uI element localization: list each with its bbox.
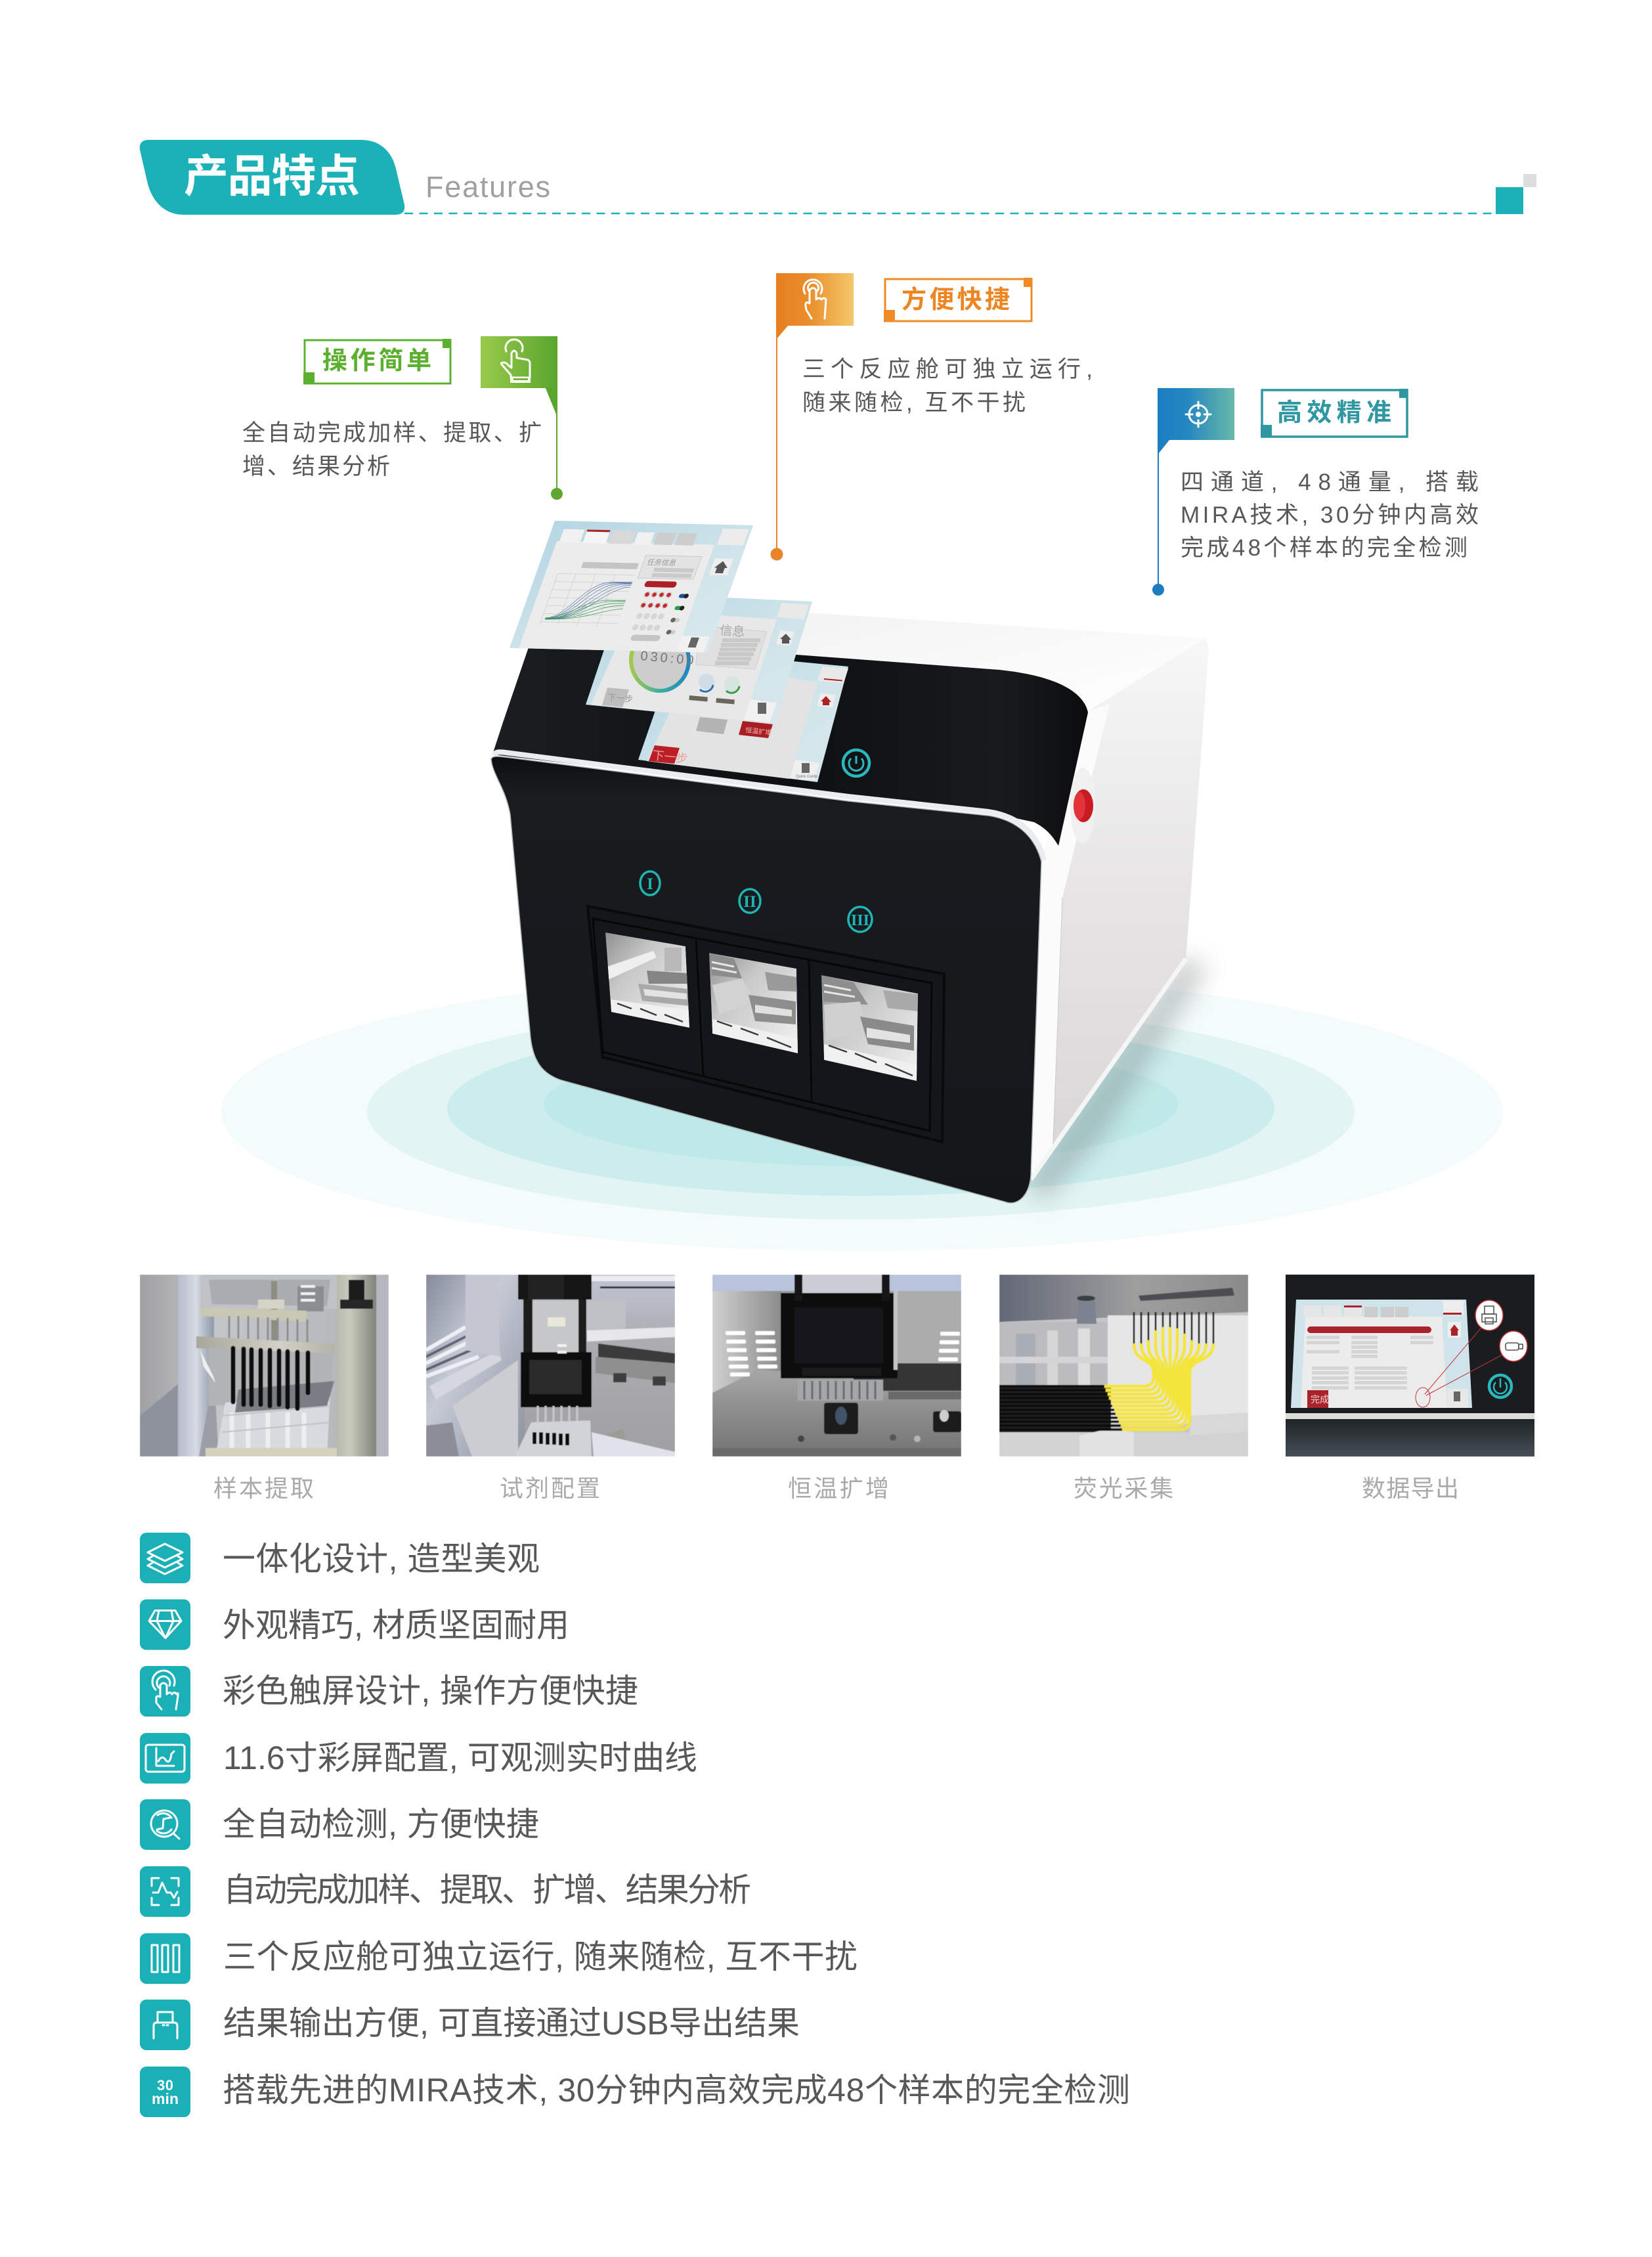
feature 9: MIRA technology in 30 minutes	[140, 2067, 1130, 2117]
dashed header rule with end squares	[404, 174, 1536, 214]
machine side panel	[1030, 638, 1209, 1182]
chamber window II	[709, 953, 798, 1053]
channel marker I	[640, 871, 660, 895]
upper black touch panel	[492, 644, 1088, 846]
feature 5: fully automatic detection: 全自动检测, 方便快捷	[223, 1806, 539, 1843]
subtitle: Features: Features	[425, 170, 550, 204]
channel marker II	[739, 889, 760, 913]
leader line and dot	[771, 335, 783, 561]
chamber window I	[605, 932, 689, 1028]
callout description: 全自动完成加样、提取、扩	[242, 420, 542, 446]
photo: data export	[1286, 1275, 1534, 1457]
callout description: 随来随检, 互不干扰	[802, 390, 1026, 416]
feature 7: three independent chambers	[140, 1933, 858, 1984]
label box	[884, 278, 1032, 322]
title banner	[140, 140, 404, 215]
callout description	[1181, 470, 1479, 561]
feature 1: integrated design: 一体化设计, 造型美观	[223, 1541, 540, 1577]
touch screen 2: temperature step	[586, 593, 812, 724]
task info box: 任务信息	[645, 558, 678, 567]
caption: 数据导出: 数据导出	[1362, 1475, 1459, 1502]
leader line and dot	[1152, 450, 1164, 596]
channel marker III: III	[851, 912, 869, 929]
amplification chart	[540, 573, 635, 627]
photo: data export: 完成	[1311, 1394, 1329, 1405]
feature 3: colour touch screen	[140, 1666, 638, 1717]
label box	[1261, 389, 1408, 437]
label box	[303, 339, 451, 384]
feature 4: 11.6 inch screen	[140, 1733, 697, 1784]
caption: 恒温扩增: 恒温扩增	[788, 1475, 889, 1502]
touch screen 3: reagent step: Quick Guide	[796, 775, 818, 779]
feature 6: automated workflow	[140, 1866, 751, 1917]
photo: isothermal amplification	[712, 1275, 961, 1457]
icon: target on blue flag	[1158, 388, 1234, 454]
feature 9: MIRA technology in 30 minutes: min	[152, 2090, 179, 2107]
callout description: 四通道, 48通量, 搭载	[1181, 470, 1479, 495]
feature 9: MIRA technology in 30 minutes: 30	[157, 2077, 173, 2093]
feature 8: USB export: 结果输出方便, 可直接通过USB导出结果	[223, 2005, 800, 2042]
caption: 荧光采集: 荧光采集	[1074, 1475, 1173, 1502]
instrument illustration	[491, 521, 1209, 1203]
feature 2: compact and sturdy	[140, 1600, 569, 1650]
feature 7: three independent chambers: 三个反应舱可独立运行, 随来随检, 互不干扰	[223, 1939, 858, 1975]
front black panel	[491, 756, 1041, 1203]
photo: fluorescence collection	[999, 1275, 1248, 1457]
caption: 试剂配置: 试剂配置	[500, 1475, 600, 1502]
icon: touch on orange flag	[776, 273, 854, 339]
photo: sample extraction	[140, 1275, 389, 1457]
callout description: 三个反应舱可独立运行,	[802, 357, 1093, 382]
touch screen 2: temperature step: 下一步	[607, 692, 634, 704]
side buttons	[676, 529, 749, 653]
callout: 高效精准	[1152, 388, 1479, 596]
task info box	[638, 556, 702, 579]
label box: 操作简单	[322, 347, 431, 375]
feature 4: 11.6 inch screen: 11.6寸彩屏配置, 可观测实时曲线	[223, 1740, 697, 1776]
reaction chamber door frame	[588, 906, 944, 1142]
title banner: 产品特点	[184, 152, 360, 202]
callout: 方便快捷	[771, 273, 1093, 561]
feature 1: integrated design	[140, 1533, 540, 1583]
feature list	[140, 1533, 1130, 2117]
channel marker I: I	[647, 875, 653, 893]
power button	[843, 750, 869, 776]
touch screen 2: temperature step: 030:00	[640, 649, 697, 668]
leader line and dot	[551, 414, 563, 500]
feature 5: fully automatic detection	[140, 1799, 539, 1850]
callout description	[802, 357, 1093, 416]
touch screen 3: reagent step: 恒温扩增	[745, 726, 772, 737]
cast shadow	[1024, 959, 1208, 1202]
header: product features	[140, 140, 1536, 215]
label box: 方便快捷	[902, 286, 1010, 314]
callout description: 增、结果分析	[242, 454, 390, 479]
emergency stop button	[1070, 768, 1095, 844]
callout description: MIRA技术, 30分钟内高效	[1181, 502, 1479, 528]
status pill	[581, 562, 639, 569]
machine top surface	[796, 613, 1207, 712]
touch screen 3: reagent step	[638, 650, 848, 782]
channel marker II: II	[743, 893, 756, 911]
icon: tap gesture on green flag	[481, 336, 557, 416]
chamber window III	[821, 975, 918, 1081]
white trim strip	[494, 752, 1044, 860]
tabs	[559, 529, 698, 546]
feature 3: colour touch screen: 彩色触屏设计, 操作方便快捷	[223, 1673, 638, 1709]
channel marker III	[848, 907, 872, 932]
channel indicators	[624, 581, 693, 642]
callout description	[242, 420, 542, 479]
feature 2: compact and sturdy: 外观精巧, 材质坚固耐用	[223, 1607, 569, 1644]
callout: 操作简单	[242, 336, 563, 500]
caption: 样本提取: 样本提取	[213, 1475, 314, 1502]
touch screen 2: temperature step: 信息	[720, 623, 745, 640]
touch screen 1: amplification curves	[510, 521, 753, 653]
feature 8: USB export	[140, 2000, 800, 2050]
platform ellipses under instrument	[221, 973, 1503, 1251]
feature 9: MIRA technology in 30 minutes: 搭载先进的MIRA技术, 30分钟内高效完成48个样本的完全检测	[223, 2072, 1130, 2109]
feature 6: automated workflow: 自动完成加样、提取、扩增、结果分析	[223, 1872, 751, 1908]
callout description: 完成48个样本的完全检测	[1181, 535, 1467, 561]
label box: 高效精准	[1277, 399, 1391, 427]
photo: reagent preparation	[426, 1275, 675, 1457]
touch screen 3: reagent step: 下一步	[652, 749, 688, 766]
